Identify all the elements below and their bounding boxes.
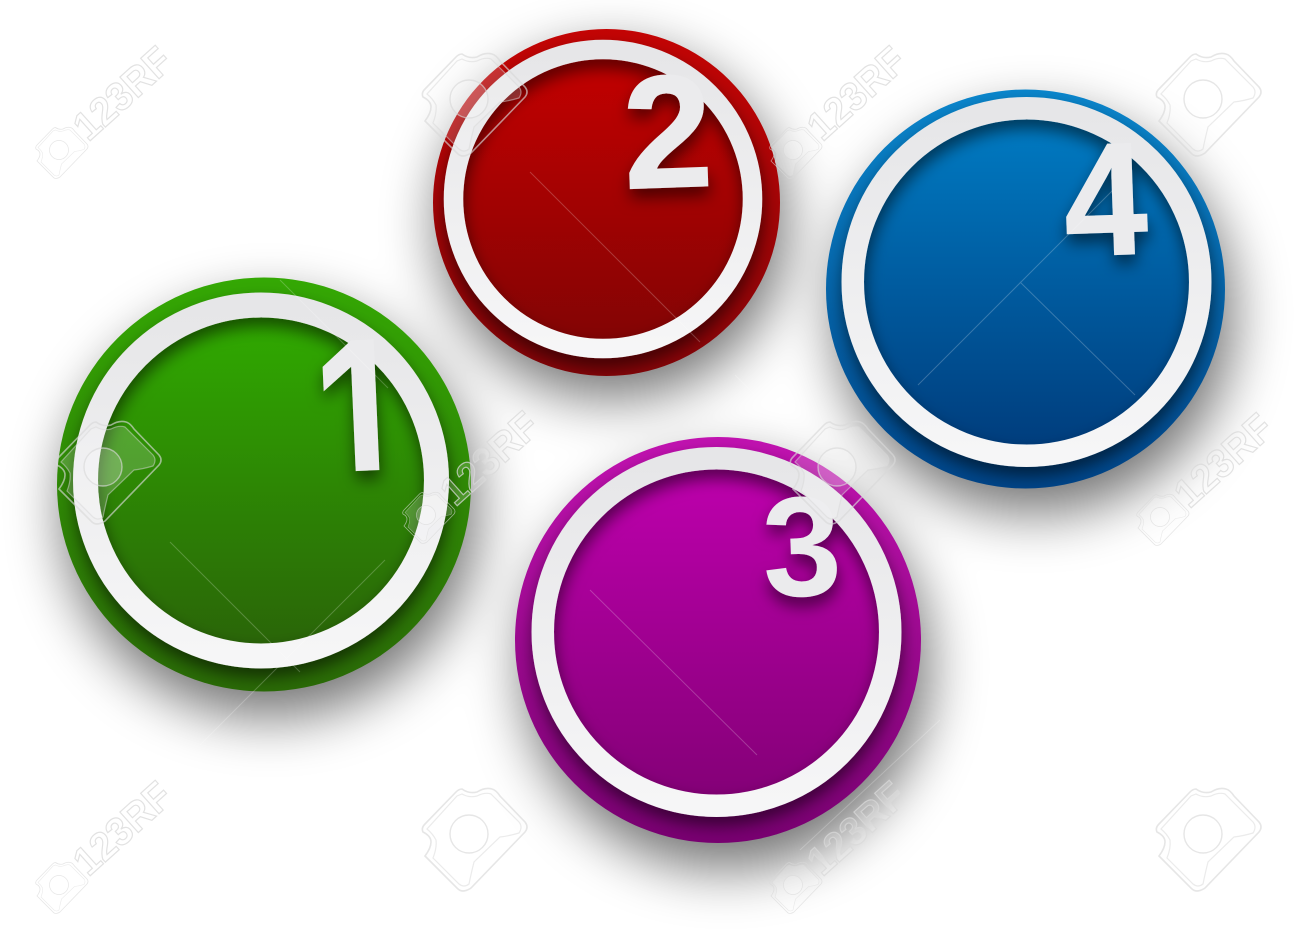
watermark labels: 123RF (799, 774, 915, 884)
watermark labels: 123RF (65, 39, 181, 149)
watermark labels: 123RF (799, 39, 915, 149)
outer disc (433, 29, 780, 376)
inner disc (458, 54, 748, 344)
outer disc (57, 278, 471, 692)
ring and number 3: 3 (760, 466, 844, 628)
ring and number 3 (543, 458, 890, 806)
ring and number 2: 2 (620, 40, 715, 222)
circle 1: green (57, 278, 471, 692)
circle 3: purple (515, 437, 921, 843)
watermark labels: 123RF (432, 404, 548, 514)
inner disc (546, 462, 886, 802)
outer disc (515, 437, 921, 843)
watermark labels: 123RF (65, 774, 181, 884)
drop shadows (63, 50, 1233, 869)
ring and number 2 (454, 40, 752, 348)
inner disc (856, 112, 1196, 452)
ring and number 1: 1 (308, 288, 415, 546)
circle 2: red (433, 29, 780, 376)
outer disc (826, 90, 1225, 488)
ring and number 4: 4 (1061, 108, 1150, 290)
ring and number 1 (86, 288, 436, 656)
ring and number 4 (853, 108, 1200, 456)
circle 4: blue (826, 90, 1225, 488)
inner disc (92, 310, 432, 650)
faint watermark lines (170, 172, 1135, 850)
watermark labels: 123RF (1166, 406, 1282, 516)
